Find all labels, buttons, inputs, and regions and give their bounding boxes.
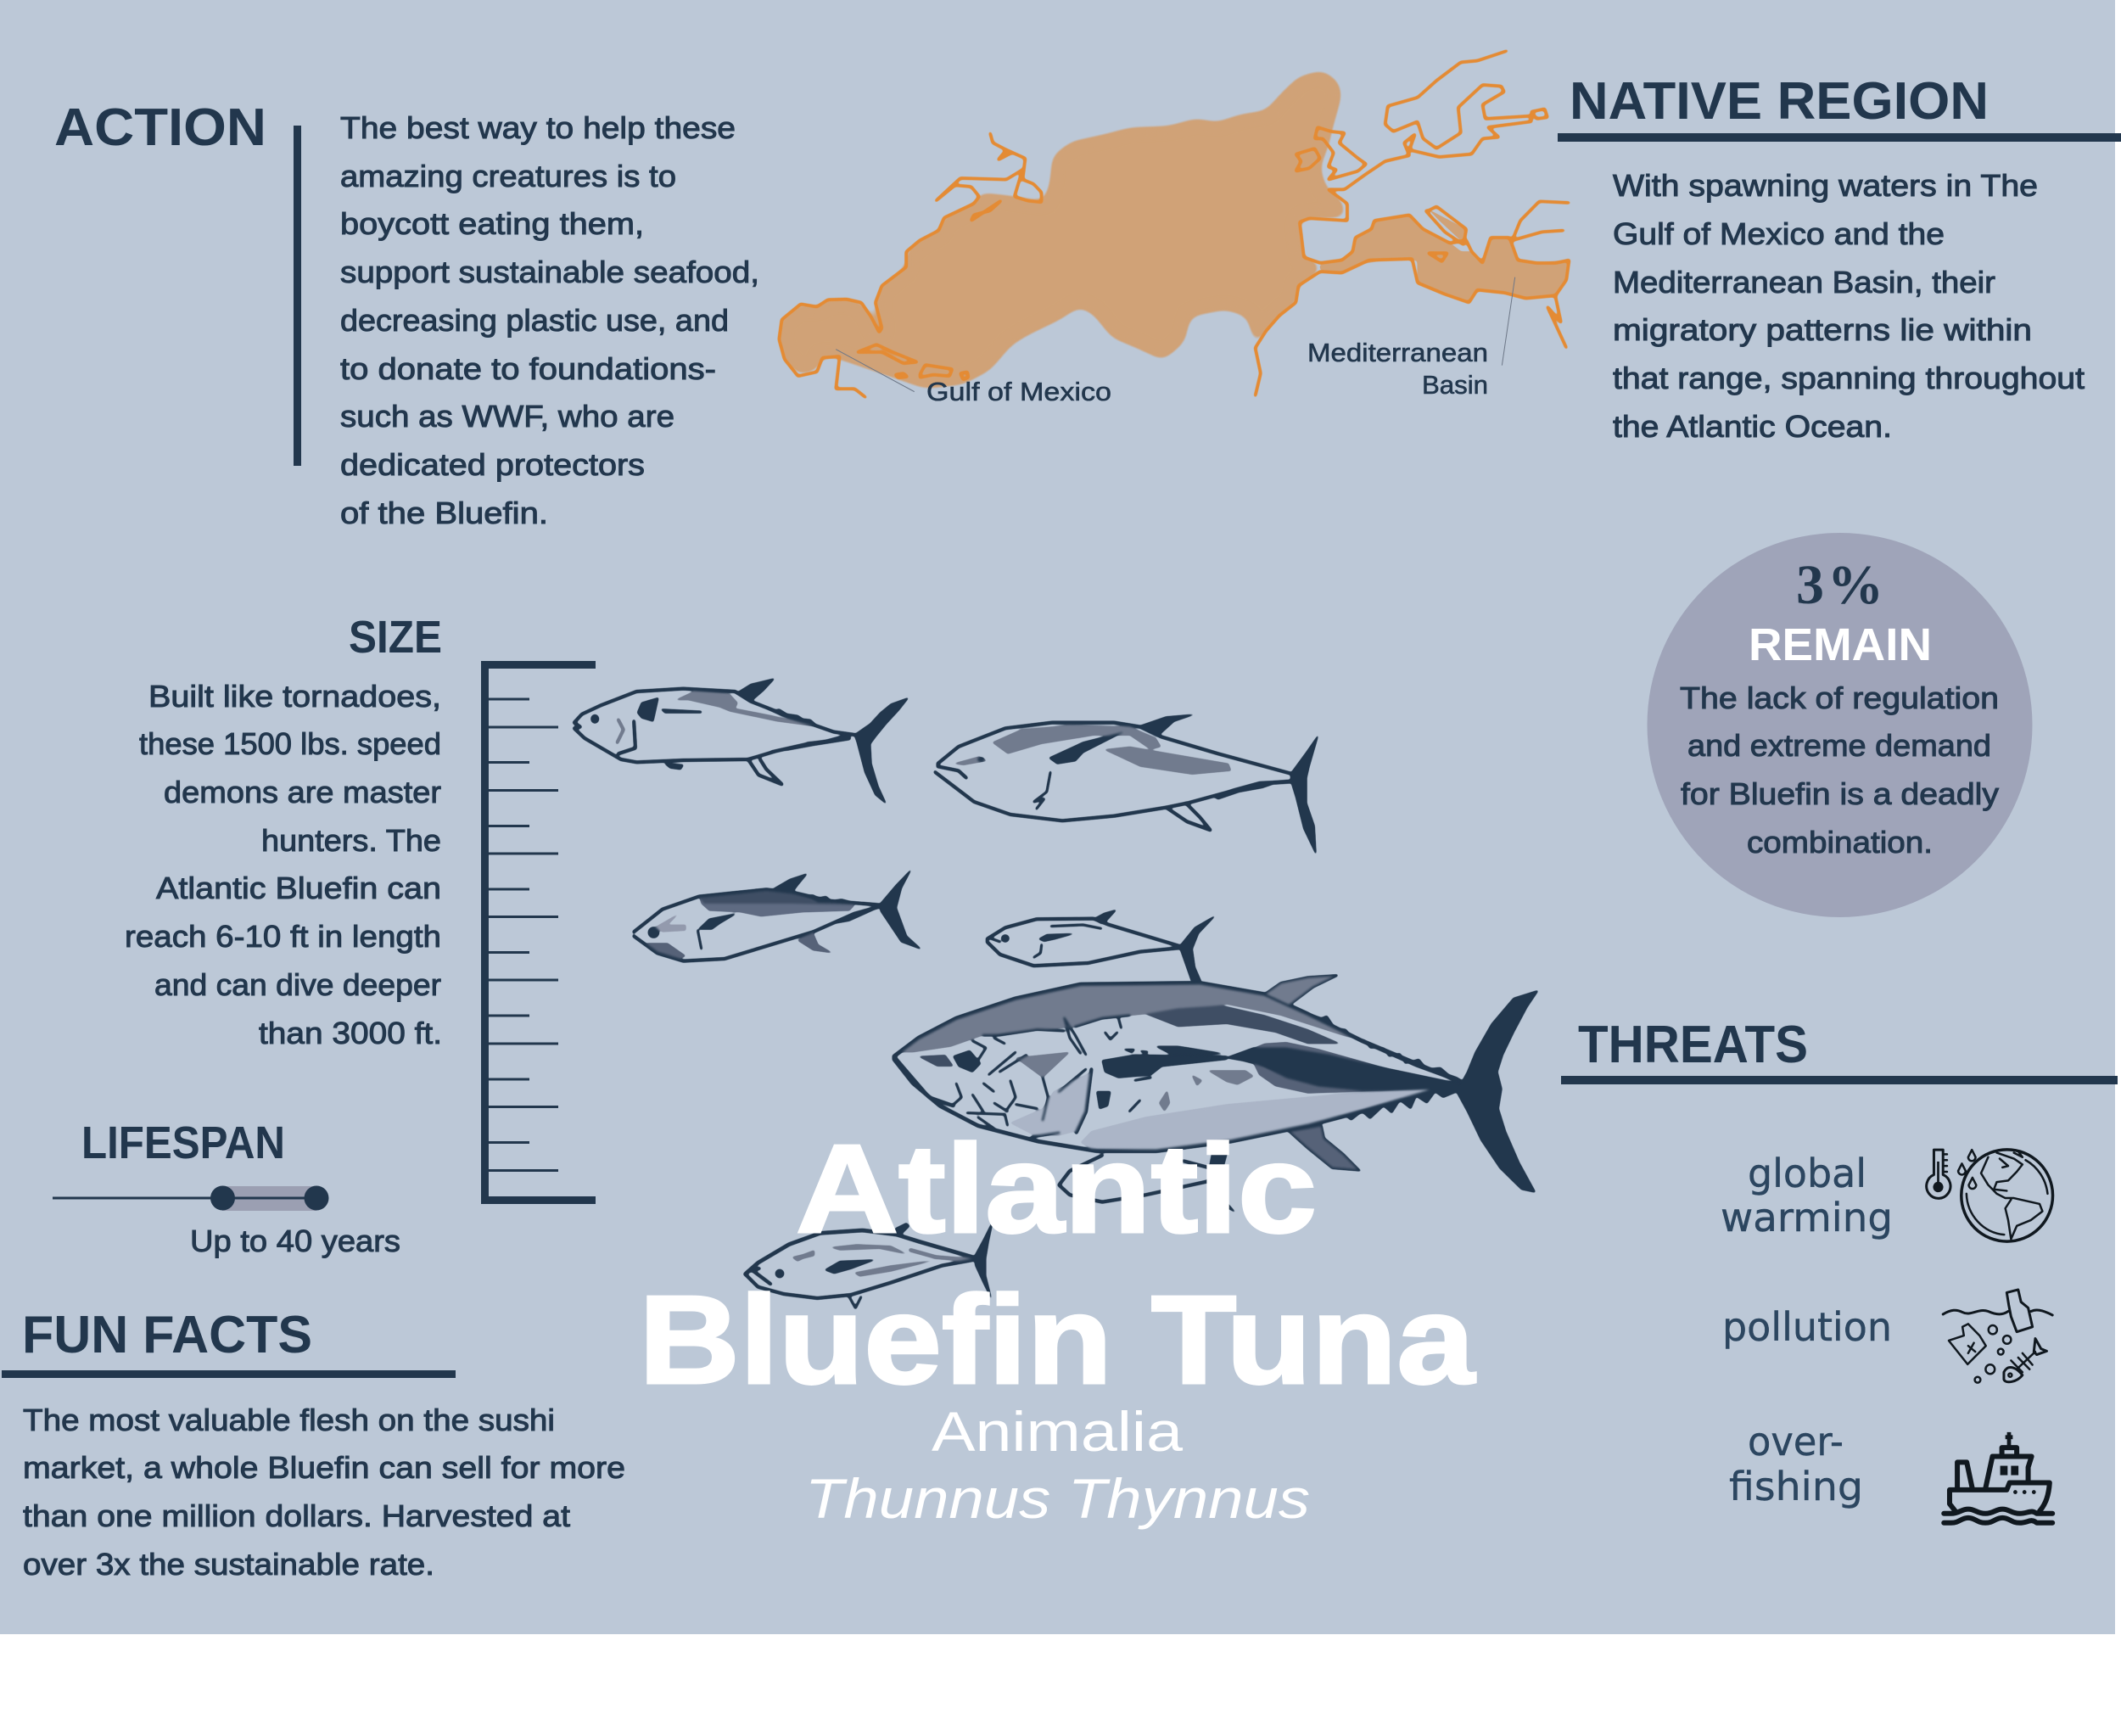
text block: native region [1613, 168, 2085, 444]
label: overfishing: over- [1748, 1419, 1844, 1464]
atlantic range fill [779, 70, 1347, 389]
text block: action: to donate to foundations- [340, 351, 716, 386]
fish: middle right [987, 910, 1215, 983]
heading: lifespan: LIFESPAN [81, 1117, 285, 1168]
heading: fun facts: FUN FACTS [22, 1306, 312, 1364]
title: Atlantic [796, 1119, 1317, 1259]
text block: size: than 3000 ft. [259, 1016, 442, 1050]
text block: size: demons are master [164, 775, 441, 809]
subtitle: species: Thunnus Thynnus [805, 1467, 1310, 1530]
text block: fun facts [23, 1403, 625, 1582]
threats rule [1561, 1076, 2118, 1084]
illustration: lower tuna [745, 1222, 993, 1308]
label: pollution: pollution [1722, 1304, 1892, 1350]
head and gill detail [954, 1016, 1151, 1137]
fun facts rule [2, 1370, 456, 1378]
label: global warming [1721, 1151, 1893, 1240]
heading: native region: NATIVE REGION [1570, 72, 1989, 131]
panel: size [125, 612, 596, 1204]
label: overfishing [1729, 1419, 1863, 1509]
icon: fishing boat [1944, 1432, 2052, 1523]
fish: top left [574, 679, 908, 804]
panel: threats [1561, 1016, 2118, 1523]
text block: fun facts: market, a whole Bluefin can sell for more [23, 1450, 625, 1485]
body outline [894, 983, 1470, 1086]
text block: action: support sustainable seafood, [340, 255, 759, 289]
text block: size [125, 679, 442, 1050]
heading: size: SIZE [349, 612, 442, 663]
text block: action: such as WWF, who are [340, 399, 674, 434]
anal fin [1289, 1126, 1359, 1170]
dark side stripe [1227, 1048, 1470, 1090]
text block: fun facts: than one million dollars. Harvested at [23, 1498, 570, 1533]
panel: action [54, 98, 759, 530]
mediterranean range fill [1320, 215, 1569, 303]
belly shading [1081, 1089, 1432, 1150]
action vertical bar [294, 126, 301, 466]
text block: action: dedicated protectors [340, 447, 645, 482]
text block: fun facts: over 3x the sustainable rate. [23, 1547, 434, 1582]
text block: fun facts: The most valuable flesh on the sushi [23, 1403, 555, 1437]
text block: size: these 1500 lbs. speed [139, 726, 441, 761]
panel: lifespan [53, 1117, 400, 1258]
second dorsal fin [1265, 975, 1338, 1005]
ruler [481, 661, 596, 1204]
text block: size: Atlantic Bluefin can [156, 871, 441, 905]
icon: global warming [1927, 1150, 2053, 1241]
text block: size: reach 6-10 ft in length [125, 919, 441, 954]
text block: native region: that range, spanning throughout [1613, 361, 2085, 395]
label: mediterranean basin: Mediterranean [1307, 338, 1488, 367]
text block: action [340, 110, 759, 530]
text block: size: Built like tornadoes, [148, 679, 441, 714]
heading: remain: REMAIN [1749, 619, 1932, 670]
heading: action: ACTION [54, 98, 266, 157]
label: mediterranean basin: Basin [1422, 370, 1488, 400]
illustration: main tuna [894, 975, 1538, 1212]
upper finlets [1302, 1011, 1470, 1086]
head shading [1010, 1072, 1091, 1135]
tail [1457, 991, 1538, 1192]
text block: native region: migratory patterns lie within [1613, 312, 2032, 347]
text block: native region: With spawning waters in The [1613, 168, 2038, 203]
text block: size: and can dive deeper [154, 967, 441, 1002]
text block: action: boycott eating them, [340, 206, 644, 241]
text block: remain: combination. [1747, 825, 1933, 860]
text block: size: hunters. The [261, 823, 441, 858]
text block: remain: and extreme demand [1687, 728, 1991, 763]
illustration: upper tuna group [574, 679, 1318, 983]
text block: native region: Gulf of Mexico and the [1613, 216, 1945, 251]
coastlines [779, 51, 1569, 397]
label: global warming: warming [1721, 1195, 1893, 1240]
subtitle: kingdom: Animalia [932, 1400, 1183, 1463]
panel: native region [1558, 72, 2121, 444]
label: global warming: global [1748, 1151, 1866, 1196]
lifespan timeline [53, 1186, 329, 1211]
text block: action: of the Bluefin. [340, 496, 548, 530]
title: Bluefin Tuna [639, 1270, 1476, 1410]
native region rule [1558, 133, 2121, 142]
text block: native region: Mediterranean Basin, their [1613, 265, 1995, 300]
map leader: gulf [836, 350, 915, 392]
small fish behind title [1059, 1148, 1234, 1212]
dark stripe [1145, 1005, 1340, 1044]
gray band above dark side stripe [1238, 1042, 1389, 1069]
label: gulf of mexico: Gulf of Mexico [926, 377, 1111, 406]
text block: remain: for Bluefin is a deadly [1681, 776, 1999, 811]
text block: action: The best way to help these [340, 110, 736, 145]
text block: native region: the Atlantic Ocean. [1613, 409, 1892, 444]
dark lateral marks [918, 1046, 1254, 1112]
text block: remain: The lack of regulation [1680, 680, 1999, 715]
heading: threats: THREATS [1578, 1016, 1808, 1074]
fish: top right [935, 714, 1318, 854]
title [639, 1119, 1476, 1410]
fish: middle left [634, 871, 921, 961]
adriatic range fill [1429, 210, 1466, 244]
stat: 3%: 3% [1796, 554, 1883, 616]
lifespan value: Up to 40 years [190, 1224, 400, 1258]
circle [1648, 533, 2033, 917]
text block: remain [1680, 680, 1999, 860]
gray band below dark side stripe [1254, 1063, 1432, 1093]
top gray back [899, 983, 1352, 1052]
text block: action: amazing creatures is to [340, 159, 676, 193]
label: overfishing: fishing [1729, 1464, 1863, 1509]
text block: action: decreasing plastic use, and [340, 303, 729, 338]
panel: fun facts [2, 1306, 625, 1582]
icon: pollution [1943, 1290, 2052, 1383]
map: native range [779, 51, 1569, 397]
panel: 3% remain [1648, 533, 2033, 917]
label: mediterranean basin [1307, 338, 1488, 400]
lower finlets [1346, 1086, 1470, 1120]
map leader: mediterranean [1502, 277, 1515, 366]
